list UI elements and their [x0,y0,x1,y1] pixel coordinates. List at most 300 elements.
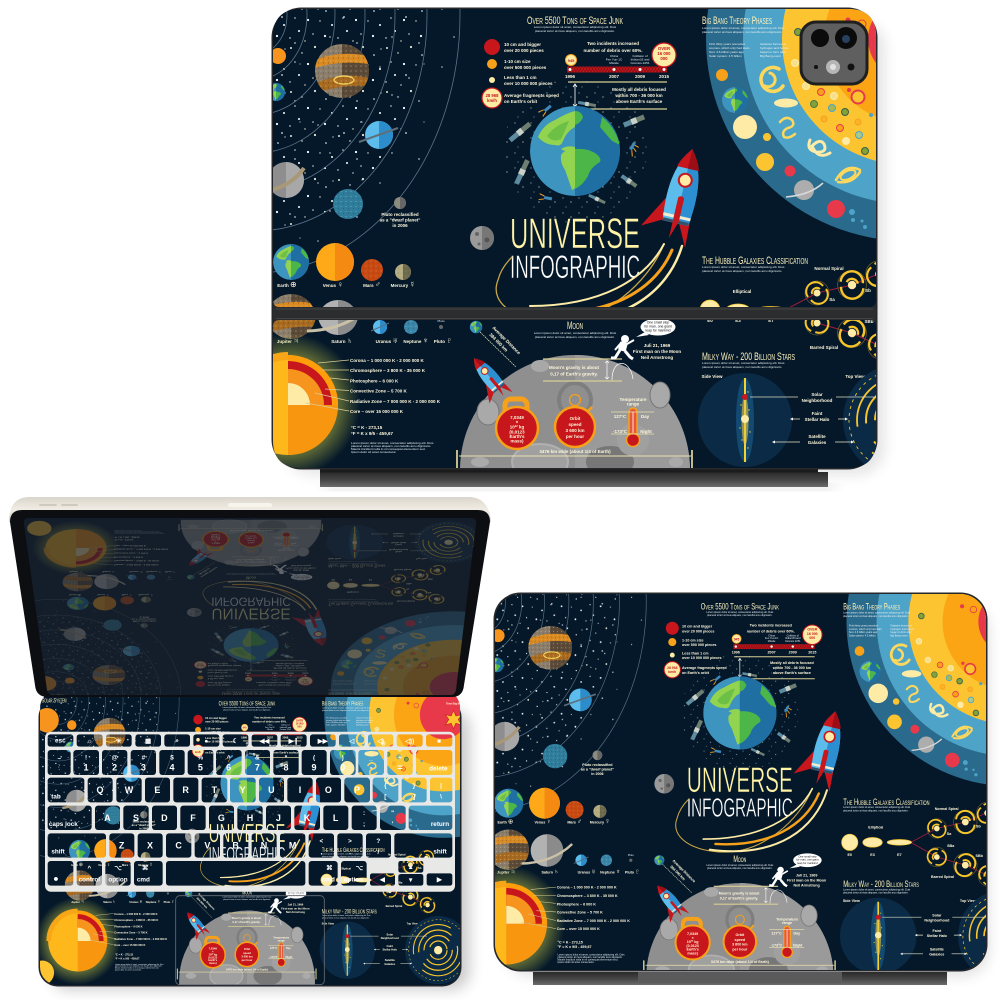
key labels: ◀ [379,877,385,884]
key labels: T [212,785,218,795]
key labels: ^ [227,753,231,761]
chart: debris timeline: Missile [609,61,619,65]
planet: earth [273,244,309,280]
text: milky way intro [702,366,785,374]
labels: elliptical: E0 [707,323,713,328]
milky way callouts: Solar [811,397,823,402]
text: incidents [583,41,643,53]
key labels: ) [342,754,344,761]
key labels: H [247,813,253,823]
key labels: ⌘ [326,865,332,872]
key labels: esc [55,738,66,745]
key labels: K [304,813,311,823]
key labels: ▶▶ [317,738,328,745]
key labels: ☼ [87,738,93,745]
title: infographic: INFOGRAPHIC [510,249,640,285]
text: first man on the moon: Juli 21, 1969 [644,348,671,353]
key labels: Z [119,841,125,851]
text: sun notes: placerat tortor at risus aliquam, non lacullis arcu dignissim. [351,449,431,453]
key labels: ● [53,873,59,883]
key labels: _ [368,754,373,761]
labels: spiral types: Normal Spiral [814,266,844,271]
planet: jupiter lower [264,294,318,344]
key labels: ☀ [116,738,122,745]
icons: outer ring bodies [716,69,867,229]
text: phase notes: hydrogen and helium [760,46,789,50]
gravity note: 0,17 of Earth's gravity. [550,376,598,382]
earth to moon distance [470,326,522,372]
keyboard frame with key openings [45,732,455,892]
text: phase notes: First thirty years preceded [709,42,745,46]
chart: debris timeline: 2007 [609,74,620,79]
panel: top magic keyboard skin [272,8,888,492]
key labels: ◁) [376,738,384,745]
key labels: 5 [198,762,203,772]
legend: debris sizes: over 10 000 000 pieces [504,81,553,86]
key labels: cmd [137,877,150,884]
key labels: # [142,754,146,761]
key labels: ' [392,821,394,828]
key labels: > [348,838,352,845]
panel: keyboard deck skin [0,543,563,990]
text: moon intro: placerat tortor at risus aliquam, non lacullis arcu dignissim. [535,340,615,344]
key labels: ~ [57,756,61,763]
icon: weight with mass [496,404,538,454]
text: sun layers: Radiative Zone – 7 000 000 K - 2 000 000 K [350,404,441,409]
labels: outer planets: Jupiter ♃ [277,341,299,350]
dots around earth [503,79,647,223]
planet: mercury [395,264,411,280]
text: sun layers: Photosphere – 6 000 K [350,384,399,388]
planets row: Pluto [437,324,445,328]
chart: debris timeline: 2009 [635,74,646,79]
galaxy top view [843,369,955,481]
icon: weight with mass: (0,0123 [509,434,525,440]
key labels: S [133,813,139,823]
text: pluto note [380,212,420,228]
key labels: . [349,849,351,856]
speech bubble [636,324,676,342]
heading: moon: Moon [567,325,583,337]
text: sun layers [350,363,441,441]
connector lines [785,274,880,351]
key labels: R [182,785,189,795]
heading: big bang: Big Bang Theory Phases [702,15,772,27]
icon: thermometer: Temperature [620,402,647,407]
moon width scale: 3476 km wide (about 1/4 of Earth) [539,454,611,459]
planet: uranus [359,121,398,149]
key labels: \ [440,794,442,801]
icon: stopwatch orbit speed: per hour [566,439,584,444]
labels: outer planets: Pluto ♇ [434,341,452,350]
key labels: = [397,762,403,772]
chart: debris timeline: 2015 [659,74,670,79]
text: sun notes: Ipsum dolor sit amet consectetur. [351,455,397,459]
key labels: ^ [87,864,91,872]
text: phase notes: Solar system: 4.5 billion [709,54,742,58]
key labels: shift [51,849,66,856]
labels: inner planets: Mercury ☿ [391,280,415,289]
tablet screen reflection [0,515,577,793]
planet: pluto [394,197,406,209]
icon: earth [530,106,620,196]
text: milky way intro: Lorem ipsum dolor sit amet, consectetur adipiscing elit. Duis [702,366,785,370]
icon: stopwatch orbit speed: speed [568,427,582,432]
small sun at edge [208,442,248,482]
key labels: } [413,782,416,789]
labels: spiral types: Barred Spiral [810,350,838,355]
text: phase notes: Sun: 4.6 billion years ago [709,50,744,54]
legend: debris sizes: km/h [487,98,497,103]
moon width scale [457,454,692,473]
chart: debris timeline: OVER [658,46,671,51]
chart: debris timeline: Collision of [632,54,648,58]
icon: thermometer: Night [640,434,652,439]
icons: galaxies ring [761,67,860,182]
key labels: $ [170,754,174,761]
key labels: shift [433,849,448,856]
key labels: : [363,810,365,817]
key labels: ⌘ [142,865,148,872]
text: pluto note: Pluto reclassified [381,212,419,217]
legend: debris sizes: on Earth's orbit [504,99,538,104]
labels: elliptical [707,289,774,328]
labels: elliptical: E3 [735,323,741,328]
key labels: + [398,754,402,761]
text: first man on the moon: First man on the Moon [633,354,681,359]
text: sun layers: Core – over 15 000 000 K [350,414,404,419]
infographic artwork [50,0,1000,490]
key labels: option [108,877,128,884]
key labels: ◁)) [404,738,414,745]
small gray moon [470,226,494,250]
key labels: ▦ [145,738,151,745]
planet: venus [316,243,354,281]
camera module [801,22,867,84]
panel: moon [457,324,692,485]
tablet frame top [9,497,491,522]
key labels: [ [384,794,387,801]
heading: milky way: Milky Way - 200 Billion Stars [702,356,795,368]
labels: views: Side View [702,379,723,384]
key labels: & [255,754,260,761]
icons: satellites [508,100,645,205]
key labels: 3 [141,762,146,772]
key labels: I [299,785,301,795]
key labels: U [268,785,275,795]
rocket trails [496,244,682,322]
legend: debris sizes [482,39,559,108]
chart: debris timeline [565,43,676,79]
icon: thermometer: range [627,406,640,412]
chart: debris timeline: Cosmos 2251 [630,61,650,65]
labels: elliptical: E7 [768,323,774,328]
altitude markers: Mostly all debris focused [612,87,666,92]
text: space junk intro: Lorem ipsum dolor sit amet, consectetur adipiscing elit. Duis [534,25,617,29]
text: phase notes [709,42,789,58]
key labels: D [161,813,168,823]
key labels: 9 [311,762,316,772]
key labels: ▲ [408,864,414,871]
key labels: P [354,785,360,795]
text: big bang intro: Lorem ipsum dolor sit amet, consectetur adipiscing elit. Duis [702,26,785,30]
labels: outer planets: Neptune ♆ [403,341,429,350]
panel: bottom right keyboard skin [312,392,1000,989]
text: sun notes: Lorem ipsum dolor sit amet, consectetur adipiscing elit. Duis [351,446,434,450]
key labels: L [333,813,339,823]
text: hubble intro [702,265,785,273]
icon: weight with mass: 7,0349 [510,420,524,425]
text: phase notes: Big Bang event [760,54,781,58]
milky way callouts [750,397,880,450]
icon: big rocket [638,142,707,248]
chart: debris timeline: 1996 [565,74,576,79]
icon: thermometer: -173°C [613,434,628,439]
key labels: V [204,841,210,851]
key labels: < [319,838,323,845]
text: pluto note: in 2006 [392,223,408,228]
key labels: % [198,754,204,761]
heading: hubble: The Hubble Galaxies Classification [702,255,808,267]
key labels: ⌕ [174,738,179,745]
key labels: ☾ [232,738,238,745]
key labels: A [104,813,111,823]
key labels: ■ [437,738,441,745]
panel: tablet with reflective screen [0,497,577,793]
key labels: " [391,810,394,817]
text: space junk intro: placerat tortor at risus aliquam, non lacullis arcu dignissim. [535,29,615,33]
icon: stopwatch orbit speed [555,400,595,452]
text: first man on the moon [633,348,681,365]
key labels: { [384,782,387,789]
key labels: N [261,841,267,851]
key labels: W [125,785,134,795]
elliptical galaxies [700,300,786,320]
tablet volume buttons [39,503,272,507]
speech bubble: leap for mankind [645,334,671,338]
chart: debris timeline: China [610,54,618,58]
text: phase notes: Galaxies formed at [760,42,786,46]
labels: outer planets: Uranus ♅ [376,341,398,350]
icons: atoms ring [792,18,873,154]
key labels: 4 [169,762,174,772]
text: sun layers: °C = K - 273,15 [351,430,383,435]
panel: hubble classification [700,255,894,364]
text: milky way intro: placerat tortor at risus aliquam, non lacullis arcu dignissim. [702,370,782,374]
earth to moon distance: 384 000 km [488,337,509,358]
icon: weight with mass: 10²² kg [510,430,524,434]
tablet glass [10,510,490,697]
key labels: ? [376,838,380,845]
icon: thermometer: Day [641,419,650,424]
heading: solar system: Solar System [227,10,269,22]
icon: weight with mass: mass) [510,444,524,448]
key labels: cmd [322,877,335,884]
title: universe: UNIVERSE [510,210,640,258]
milky way callouts: Satellite [808,439,826,444]
key labels: control [79,877,100,884]
key labels: ◀◀ [258,738,269,745]
keyboard hinge band [273,307,876,320]
spiral galaxies [801,261,894,364]
key labels: ⌥ [114,865,122,872]
key labels: return [431,821,449,828]
text: phase notes: began to form after [760,50,786,54]
labels: spiral types [810,266,874,355]
panel: milky way [698,356,955,481]
speech bubble: for man, one giant [644,330,672,334]
text: sun layers: Chromosphere – 3 800 K - 35 000 K [350,373,426,378]
text: first man on the moon: Neil Armstrong [641,360,673,365]
key labels: O [325,785,332,795]
key labels: ; [363,821,365,828]
labels: spiral types: SBb [864,324,874,329]
text: hubble intro: placerat tortor at risus aliquam, non lacullis arcu dignissim. [702,269,782,273]
text: time big bang: Time Big Bang [912,18,944,23]
key labels: M [289,841,296,851]
text: sun layers: Convective Zone – 5 700 K [350,394,408,398]
legend: debris sizes: 28 968 [486,93,499,98]
planet: mars [361,259,383,281]
icon: small rocket [461,358,513,413]
labels: elliptical: Elliptical [733,289,751,294]
planet: jupiter upper [315,44,369,98]
key labels: 8 [283,762,288,772]
labels: inner planets [277,280,415,289]
chart: debris timeline: 945 [568,58,575,63]
text: space junk intro [534,25,617,33]
legend: debris sizes: 1-10 cm size [504,59,531,64]
text: hubble intro: Lorem ipsum dolor sit amet, consectetur adipiscing elit. Duis [702,265,785,269]
planet: small earth orbit [267,83,285,101]
key labels: option [344,877,363,884]
labels: views [702,379,865,384]
key labels: | [440,782,442,789]
key labels: ⌥ [356,865,363,872]
key labels: X [147,841,153,851]
planet: saturn side [262,162,304,198]
gravity note: Moon's gravity is about [549,370,600,375]
legend: debris sizes: over 500 000 pieces [504,65,547,70]
labels: spiral types: Sa [829,297,835,302]
planet: mercury orbit dot [270,48,286,64]
text: moon intro: Lorem ipsum dolor sit amet, consectetur adipiscing elit. Duis [534,336,617,340]
key labels: delete [429,766,448,773]
key labels: F [190,813,196,823]
chart: debris timeline: 16 000 [657,51,671,56]
milky way callouts: Stellar Halo [805,422,830,427]
heading: space junk: Over 5500 Tons of Space Junk [527,15,623,27]
icon: weight with mass: × [516,424,519,430]
key labels: ` [58,765,60,772]
legend: debris sizes: Less than 1 cm [504,75,537,80]
altitude markers: above Earth's surface [616,99,663,104]
planets row [371,324,445,339]
labels: outer planets [277,341,452,350]
text: incidents: Two incidents increased [587,41,639,46]
key labels: Q [96,785,103,795]
key labels: ( [313,754,316,761]
labels: inner planets: Earth ⊕ [277,280,297,289]
labels: outer planets: Saturn ♄ [331,341,353,350]
altitude markers [568,82,667,109]
sun layer lines [306,365,349,416]
key labels: 2 [112,762,117,772]
text: moon intro [534,336,617,344]
key labels: , [320,849,322,856]
earth to moon distance: Average Distance [491,330,522,361]
planet: neptune [333,189,363,219]
key labels: 6 [226,762,231,772]
legend: debris sizes: Average fragments speed [504,93,559,98]
chart: debris timeline: Fen Yun-1C [606,58,623,62]
key labels: E [154,785,160,795]
milky way callouts: Faint [812,416,823,421]
key labels: G [218,813,225,823]
key labels: ● [204,738,208,745]
text: big bang intro [702,26,785,34]
moon disc [460,360,690,485]
panel: solar system [50,0,460,344]
icon: thermometer [611,402,654,452]
chart: debris timeline: 000 [660,56,668,61]
speech bubble: One small step [647,326,669,330]
key labels: Y [240,785,246,795]
labels: views: Top View [845,379,865,384]
labels: spiral types: Sb [865,288,871,293]
key labels: 1 [83,762,88,772]
key labels: C [175,841,182,851]
key labels: ▼ [408,877,414,884]
key labels: - [369,762,372,772]
sun core small [40,676,59,732]
icon: weight with mass: Earth's [509,439,525,444]
text: phase notes: cosmos, which only had stars [709,46,750,50]
labels: inner planets: Venus ♀ [323,280,343,289]
chart: debris timeline: Iridium33 and [631,58,650,62]
labels: spiral types: SBa [830,312,839,317]
key labels: ] [413,794,415,801]
galaxy side view [698,378,792,472]
text: big bang intro: placerat tortor at risus aliquam, non lacullis arcu dignissim. [702,30,782,34]
keyboard stand [320,470,835,490]
icon: thermometer: 127°C [614,419,627,424]
text: sun notes: Mauris tincidunt nulla in mi consequat elementum sed. [351,452,426,456]
milky way callouts: Neighborhood [802,403,833,408]
icon: stopwatch orbit speed: 3 600 km [565,433,585,438]
text: incidents: number of debris over 60%. [583,48,643,53]
key labels: 7 [255,762,260,772]
stand: bottom right [533,972,947,985]
key labels: ▶❙ [288,738,299,745]
key labels: ◁ [348,738,354,745]
legend: debris sizes: over 20 000 pieces [504,48,544,53]
text: sun layers: Corona – 1 000 000 K - 2 000 000 K [350,363,425,368]
key labels: / [377,849,379,856]
text: pluto note: as a "dwarf planet" [380,218,420,222]
text: sun notes [351,446,434,459]
key labels: @ [112,754,118,761]
labels: inner planets: Mars ♂ [363,280,381,289]
icon: big bang star [911,32,939,62]
key labels: ▶ [436,877,442,884]
text: sun layers: °F = K x 9/5 - 459,67 [351,436,393,441]
planet: saturn [307,300,369,340]
key labels: tab [51,793,61,800]
altitude markers: within 700 - 36 000 km [614,93,663,98]
key labels: caps lock [49,821,78,828]
panel: big bang phases [702,0,1000,241]
